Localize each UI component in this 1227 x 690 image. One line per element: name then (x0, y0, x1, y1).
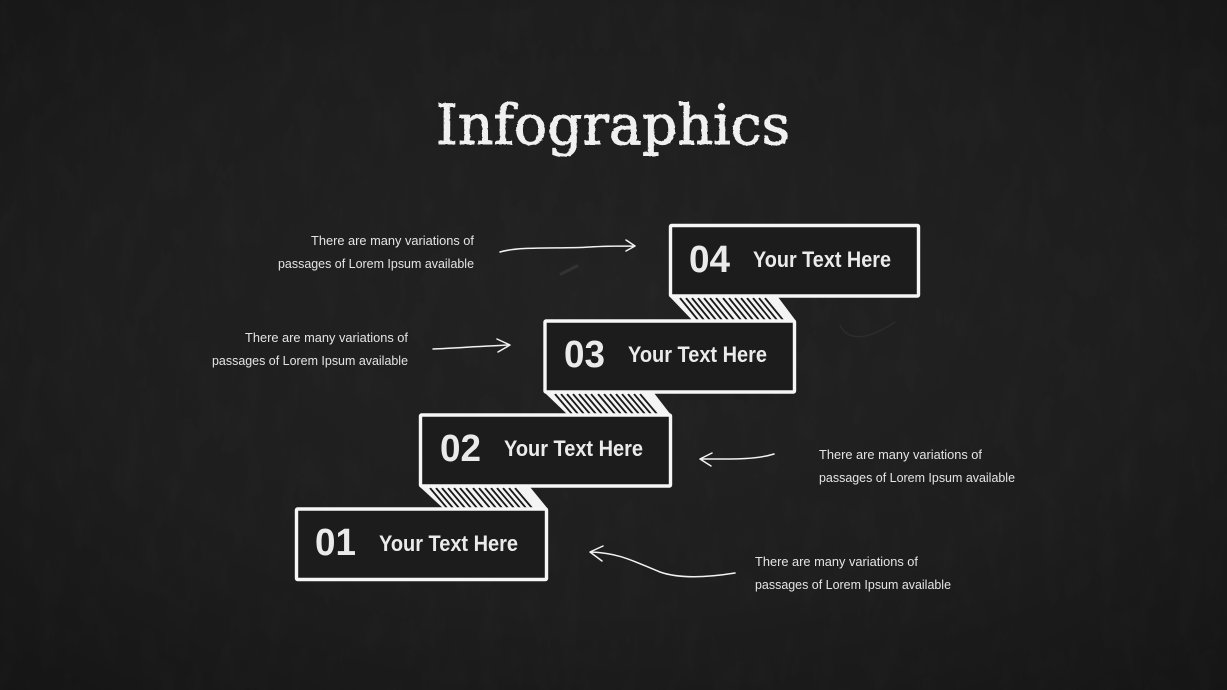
step 03 number: 03 (564, 334, 605, 376)
hatched connector 04-03 (670, 297, 796, 321)
description for step 04: There are many variations of (311, 234, 475, 248)
step 01 number: 01 (315, 522, 356, 564)
description for step 04 (278, 234, 475, 271)
step 01 label: Your Text Here (379, 531, 518, 556)
description for step 02 (819, 448, 1015, 485)
description for step 02: There are many variations of (819, 448, 983, 462)
arrow to step 04 (500, 240, 635, 252)
description for step 02: passages of Lorem Ipsum available (819, 471, 1015, 485)
description for step 04: passages of Lorem Ipsum available (278, 257, 474, 271)
description for step 03: passages of Lorem Ipsum available (212, 354, 408, 368)
description for step 01: There are many variations of (755, 555, 919, 569)
step 04 label: Your Text Here (753, 247, 891, 272)
step 01 box (296, 509, 546, 580)
hatched connector 02-01 (420, 487, 548, 509)
description for step 03 (212, 331, 409, 368)
step 03 label: Your Text Here (628, 342, 767, 367)
description for step 03: There are many variations of (245, 331, 409, 345)
title: Infographics (436, 93, 790, 157)
step 02 box (420, 415, 670, 486)
description for step 01 (755, 555, 951, 592)
step 03 box (545, 321, 794, 392)
arrow to step 02 (700, 453, 774, 466)
description for step 01: passages of Lorem Ipsum available (755, 578, 951, 592)
hatched connector 03-02 (545, 393, 671, 415)
step 02 number: 02 (440, 428, 481, 470)
step 02 label: Your Text Here (504, 436, 643, 461)
arrow to step 03 (433, 339, 510, 352)
step 04 box (670, 226, 918, 296)
step 04 number: 04 (689, 239, 730, 281)
arrow to step 01 (590, 546, 735, 577)
